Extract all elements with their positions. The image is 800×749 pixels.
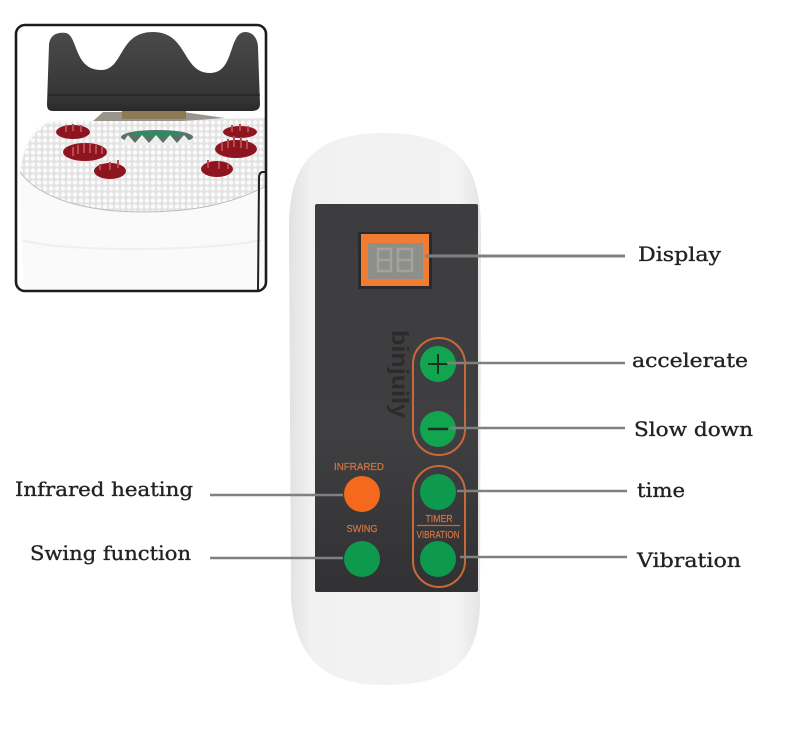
red acupoint discs bbox=[56, 125, 257, 179]
callout: slow down: Slow down bbox=[634, 417, 753, 441]
digital display bbox=[358, 232, 432, 289]
callout: infrared heating: Infrared heating bbox=[15, 477, 193, 501]
inset: massager product photo bbox=[16, 25, 266, 291]
disc pins bbox=[66, 124, 248, 170]
right divider line bbox=[258, 172, 266, 290]
callout: display: Display bbox=[638, 242, 722, 266]
callout: vibration: Vibration bbox=[636, 548, 741, 572]
timer and vibration group bbox=[413, 466, 465, 587]
remote body bbox=[289, 133, 481, 685]
massager top surface bbox=[20, 118, 266, 212]
button: vibration bbox=[420, 541, 456, 577]
brand text: binjuily bbox=[387, 330, 413, 418]
label: timer: TIMER bbox=[426, 513, 453, 525]
remote control bbox=[289, 133, 481, 685]
button: swing bbox=[344, 541, 380, 577]
callout: swing function: Swing function bbox=[30, 541, 191, 565]
callout: accelerate: accelerate bbox=[632, 348, 748, 372]
label: swing: SWING bbox=[346, 523, 378, 535]
massager base bbox=[20, 118, 266, 290]
button: plus bbox=[420, 346, 456, 382]
button: infrared bbox=[344, 476, 380, 512]
label: infrared: INFRARED bbox=[334, 461, 384, 473]
black headrest pad bbox=[47, 32, 260, 111]
button: timer bbox=[420, 474, 456, 510]
label: vibration: VIBRATION bbox=[416, 529, 460, 541]
metal bracket bbox=[93, 112, 225, 121]
central display bbox=[121, 130, 193, 144]
button: minus bbox=[420, 411, 456, 447]
dark control panel bbox=[315, 204, 478, 592]
callout: time: time bbox=[637, 478, 685, 502]
speed button group bbox=[413, 338, 465, 455]
